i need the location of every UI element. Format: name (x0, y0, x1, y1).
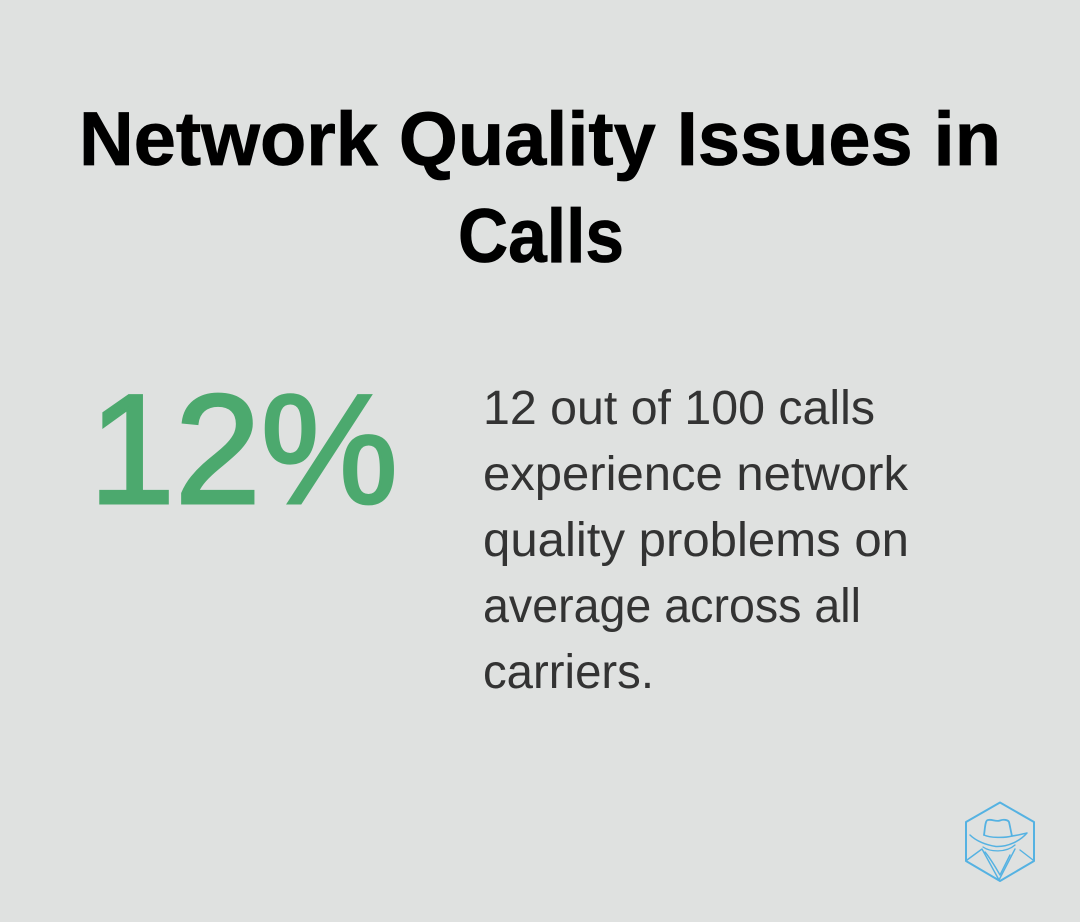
icon: spy logo in hexagon (966, 802, 1034, 881)
title: Network Quality Issues in (79, 97, 1001, 182)
description text: 12 out of 100 calls (483, 382, 875, 435)
title: Calls (458, 194, 624, 279)
description text: quality problems on (483, 514, 909, 567)
description text: carriers. (483, 646, 654, 699)
statistic: 12%: 12% (89, 363, 398, 537)
description text: experience network (483, 448, 909, 501)
description text: average across all (483, 580, 861, 633)
description text (483, 382, 909, 699)
title (79, 97, 1001, 279)
